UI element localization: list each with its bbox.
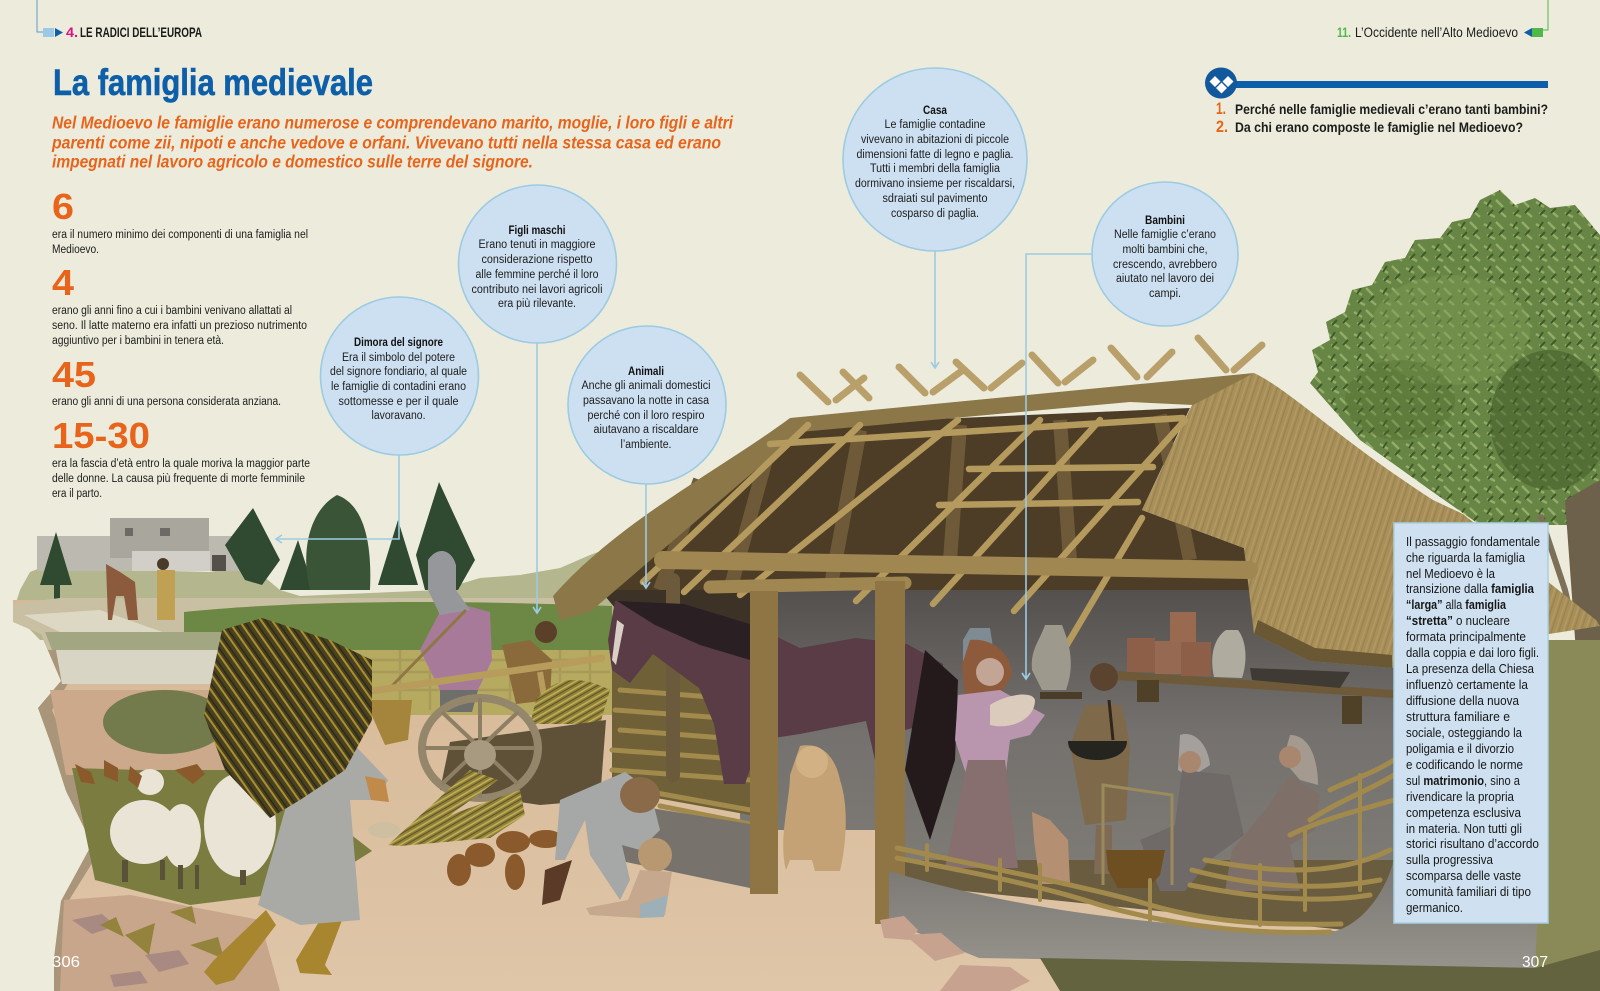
illustration: roof thatch strip — [553, 373, 1254, 620]
questions panel — [1205, 68, 1548, 136]
title: La famiglia medievale — [53, 61, 373, 103]
page number right: 307 — [1522, 954, 1548, 971]
illustration: stones near wall — [880, 916, 1030, 991]
header right: section tab — [1337, 0, 1548, 40]
illustration: right meadow — [1360, 640, 1600, 991]
text box: dalla coppia e dai loro figli. — [1406, 645, 1539, 660]
illustration: wattle fence by field — [225, 640, 610, 720]
illustration: low wall left — [607, 801, 750, 888]
illustration: dog — [783, 745, 846, 871]
text box: sulla progressiva — [1406, 852, 1494, 867]
illustration: roof poles — [643, 338, 1262, 648]
callout: Casa: vivevano in abitazioni di piccole — [861, 134, 1009, 146]
illustration: castle — [37, 518, 252, 571]
text box: sociale, osteggiando la — [1406, 725, 1523, 740]
illustration: ground and cliff — [13, 598, 1400, 991]
text box: formata principalmente — [1406, 629, 1526, 644]
illustration: thatched hip roof — [1142, 373, 1600, 668]
questions panel: 2. — [1216, 117, 1228, 136]
text box: poligamia e il divorzio — [1406, 741, 1514, 756]
callout: Animali: passavano la notte in casa — [583, 395, 710, 407]
text box: storici risultano d’accordo — [1406, 836, 1539, 851]
callout: Figli maschi: alle femmine perché il loro — [476, 269, 598, 281]
callout: Animali: Animali — [628, 366, 664, 378]
stat: 15-30: delle donne. La causa più frequente di morte femminile — [52, 473, 305, 485]
callout: Casa: cosparso di paglia. — [891, 208, 979, 220]
illustration: tree — [1310, 190, 1600, 900]
stat: 45 — [52, 354, 281, 408]
callout: Bambini: aiutato nel lavoro dei — [1116, 273, 1214, 285]
stat: 6 — [52, 186, 308, 256]
stat: 6: era il numero minimo dei componenti di una famiglia nel — [52, 229, 308, 241]
callout: Bambini: crescendo, avrebbero — [1113, 259, 1217, 271]
text box: germanico. — [1406, 900, 1463, 915]
illustration: woven fence — [897, 760, 1394, 933]
illustration: cart with wheel — [372, 658, 610, 805]
illustration: small dog — [1032, 812, 1070, 884]
illustration: baby on ground — [586, 838, 672, 918]
illustration: chickens — [75, 760, 563, 890]
stat: 4: aggiuntivo per i bambini in tenera età. — [52, 335, 224, 347]
illustration: distant hills — [13, 540, 660, 640]
callout: Casa: Le famiglie contadine — [884, 119, 986, 131]
callout line: Dimora del signore — [276, 455, 399, 543]
illustration: roof underside — [575, 408, 1250, 650]
page number left: 306 — [52, 954, 80, 971]
text box: struttura familiare e — [1406, 709, 1510, 724]
callout line: Casa — [931, 251, 939, 368]
illustration: boy on cart — [502, 621, 557, 704]
stat: 15-30: 15-30 — [52, 415, 150, 456]
illustration: man carrying bundle — [204, 618, 412, 985]
text box: nel Medioevo è la — [1406, 566, 1496, 581]
text box: competenza esclusiva — [1406, 805, 1522, 820]
header left: chapter tab: LE RADICI DELL’EUROPA — [80, 24, 202, 40]
text box: La presenza della Chiesa — [1406, 661, 1535, 676]
stat: 6: 6 — [52, 186, 74, 227]
callout: Figli maschi: Figli maschi — [508, 225, 566, 237]
callout: Figli maschi: Erano tenuti in maggiore — [478, 239, 596, 251]
text box: transizione dalla famiglia — [1406, 581, 1535, 596]
text box: “larga” alla famiglia — [1406, 597, 1507, 612]
intro text — [51, 112, 734, 172]
header right: section tab: L’Occidente nell’Alto Medioevo — [1355, 25, 1518, 40]
icon: diamonds badge — [1205, 68, 1548, 98]
callout: Bambini — [1092, 182, 1238, 326]
text box: influenzò certamente la — [1406, 677, 1529, 692]
text box: “stretta” o nucleare — [1406, 613, 1510, 628]
callout: Dimora del signore: sottomesse e per il quale — [338, 396, 458, 408]
stat: 15-30 — [52, 415, 310, 500]
callout: Animali: aiutavano a riscaldare — [594, 424, 698, 436]
callout: Casa: dimensioni fatte di legno e paglia. — [856, 149, 1014, 161]
callout: Bambini: Nelle famiglie c’erano — [1114, 229, 1216, 241]
illustration: seated women — [1140, 734, 1320, 891]
callout: Dimora del signore: lavoravano. — [372, 410, 426, 422]
callout: Bambini: Bambini — [1145, 215, 1185, 227]
questions panel: 1. — [1216, 99, 1226, 118]
illustration: purple farmer — [388, 551, 492, 712]
stat: 45: erano gli anni di una persona considerata anziana. — [52, 396, 281, 408]
header left: chapter tab — [37, 0, 202, 40]
callout: Bambini: molti bambini che, — [1122, 244, 1208, 256]
callout: Casa: sdraiati sul pavimento — [882, 193, 988, 205]
header right: section tab: 11. — [1337, 25, 1351, 40]
stat: 15-30: era il parto. — [52, 488, 102, 500]
callout line: Figli maschi — [533, 343, 541, 613]
callout line: Animali — [642, 484, 650, 588]
stat: 4: seno. Il latte materno era infatti un prezioso nutrimento — [52, 320, 307, 332]
text box: comunità familiari di tipo — [1406, 884, 1531, 899]
callout line: Bambini — [1022, 254, 1092, 679]
callout: Dimora del signore: le famiglie di contadini erano — [331, 381, 466, 393]
stat: 15-30: era la fascia d’età entro la quale moriva la maggior parte — [52, 458, 310, 470]
illustration: child bent over — [542, 772, 660, 905]
text box: che riguarda la famiglia — [1406, 550, 1526, 565]
intro text: Nel Medioevo le famiglie erano numerose e comprendevano marito, moglie, i loro figli e altri — [52, 112, 734, 132]
callout: Figli maschi: era più rilevante. — [498, 298, 576, 310]
questions panel: Da chi erano composte le famiglie nel Medioevo? — [1235, 119, 1523, 135]
callout: Casa: Casa — [923, 105, 948, 117]
text box: e codificando le norme — [1406, 757, 1523, 772]
illustration: front low wall — [889, 858, 1537, 968]
questions panel: Perché nelle famiglie medievali c’erano tanti bambini? — [1235, 101, 1548, 117]
illustration: girl with bowl — [1068, 663, 1130, 874]
illustration: conifer trees — [40, 482, 475, 600]
illustration: mother with baby — [945, 640, 1045, 868]
text box: scomparsa delle vaste — [1406, 868, 1521, 883]
text box: diffusione della nuova — [1406, 693, 1520, 708]
callout: Bambini: campi. — [1149, 288, 1181, 300]
callout: Figli maschi — [458, 185, 616, 343]
text box: rivendicare la propria — [1406, 789, 1515, 804]
callout: Figli maschi: contributo nei lavori agricoli — [472, 284, 602, 296]
callout: Animali: Anche gli animali domestici — [582, 380, 710, 392]
text box — [1394, 523, 1548, 923]
illustration: house wall — [612, 590, 1394, 935]
intro text: parenti come zii, nipoti e anche vedove e orfani. Vivevano tutti nella stessa casa ed erano — [51, 132, 721, 152]
callout: Casa: Tutti i membri della famiglia — [870, 163, 1001, 175]
illustration: shelf with pots — [1116, 612, 1394, 724]
callout: Dimora del signore: Dimora del signore — [354, 337, 443, 349]
stat: 4: 4 — [52, 262, 74, 303]
stat: 45: 45 — [52, 354, 96, 395]
callout: Dimora del signore: Era il simbolo del potere — [342, 352, 455, 364]
illustration: plough horse and farmer — [106, 558, 175, 620]
callout: Animali — [568, 326, 726, 484]
stat: 4: erano gli anni fino a cui i bambini venivano allattati al — [52, 305, 292, 317]
illustration: cauldron with stand — [1103, 785, 1172, 888]
illustration: jars — [963, 625, 1082, 699]
callout: Casa: dormivano insieme per riscaldarsi, — [855, 178, 1015, 190]
callout: Figli maschi: considerazione rispetto — [482, 254, 592, 266]
illustration: sheep — [110, 769, 276, 889]
text box: in materia. Non tutti gli — [1406, 821, 1522, 836]
intro text: impegnati nel lavoro agricolo e domestico sulle terre del signore. — [52, 152, 533, 172]
stat: 4 — [52, 262, 307, 347]
text box: sul matrimonio, sino a — [1406, 773, 1521, 788]
callout: Dimora del signore — [320, 297, 478, 455]
illustration: straw bundles on the ground — [388, 770, 525, 846]
header left: chapter tab: 4. — [66, 24, 78, 40]
callout: Animali: perché con il loro respiro — [588, 410, 704, 422]
text box: Il passaggio fondamentale — [1406, 534, 1540, 549]
illustration: house posts — [750, 581, 905, 924]
callout: Dimora del signore: del signore fondiario, al quale — [330, 366, 467, 378]
stat: 6: Medioevo. — [52, 244, 99, 256]
illustration: horse — [608, 601, 958, 840]
illustration: foreground dark grass — [1040, 950, 1600, 991]
callout: Casa — [843, 68, 1027, 251]
illustration: wattle wall behind horse — [612, 580, 750, 824]
callout: Animali: l’ambiente. — [620, 439, 672, 451]
